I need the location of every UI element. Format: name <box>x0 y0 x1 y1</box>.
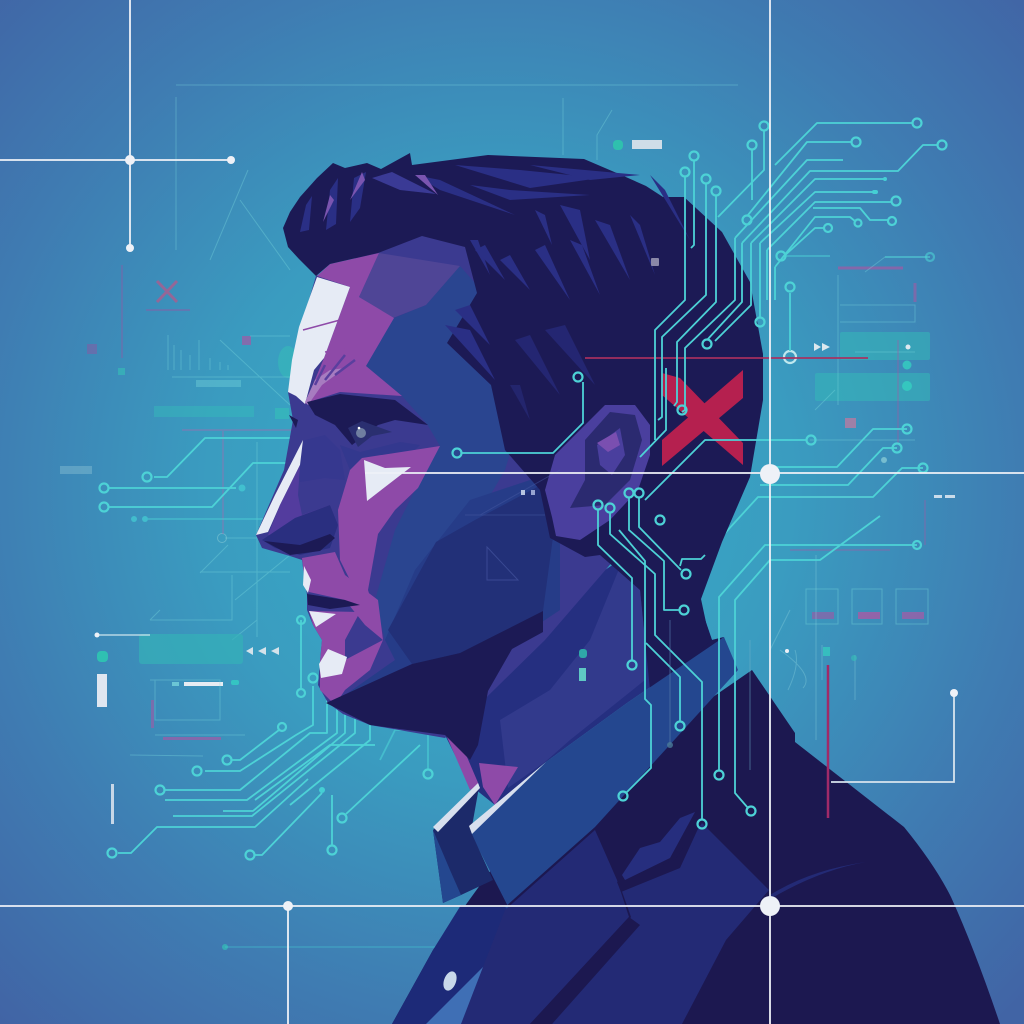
white crosshair lines behind head <box>0 0 235 252</box>
small squares <box>806 589 928 624</box>
upper lip highlight <box>303 566 311 593</box>
white forehead <box>288 277 350 404</box>
neck purple accents <box>447 737 518 805</box>
hair <box>283 153 763 650</box>
upper lapel <box>552 823 769 1024</box>
shirt collar <box>469 637 738 930</box>
nose side <box>295 435 345 482</box>
neck back shadow <box>640 590 724 690</box>
under eye socket <box>340 442 420 470</box>
chin white <box>319 649 347 678</box>
white connector lower right <box>831 689 958 782</box>
red line <box>585 357 868 359</box>
small details on face <box>487 547 518 580</box>
nostril shadow <box>262 505 338 555</box>
neck highlight <box>500 569 646 788</box>
nose front <box>268 465 338 540</box>
figure: head <box>256 153 763 760</box>
cheek purple <box>338 446 440 640</box>
shirt front <box>392 905 530 1024</box>
jacket body <box>392 670 1000 1024</box>
hair strands <box>300 165 690 420</box>
left collar piece <box>433 787 493 903</box>
nose white edge <box>256 440 303 535</box>
ear <box>545 405 650 540</box>
cheek dark blue <box>345 470 560 695</box>
circuits over head <box>452 152 816 828</box>
teal panel left <box>139 634 243 664</box>
eye <box>348 421 392 447</box>
teal dots <box>812 829 871 838</box>
lip purple <box>302 552 383 640</box>
lower lip <box>309 611 383 705</box>
face base <box>256 215 640 738</box>
face side blue <box>366 266 520 640</box>
jaw shadow <box>326 611 543 760</box>
faint technical details left <box>60 85 738 950</box>
left lapel <box>461 830 629 1024</box>
red X mark <box>662 370 743 466</box>
faint technical details right <box>613 140 955 838</box>
magenta vertical bar <box>827 665 829 818</box>
forehead panel <box>359 253 460 318</box>
top white rect <box>632 140 662 149</box>
circuits behind head <box>100 118 946 860</box>
forehead purple <box>305 253 402 404</box>
brow highlight <box>305 368 345 405</box>
figure: jacket and collar <box>392 560 1000 1024</box>
white cheek mark <box>364 460 411 501</box>
lower cheek shade <box>388 484 556 664</box>
eyebrow <box>289 394 428 445</box>
neck <box>445 560 724 805</box>
mouth line <box>307 594 360 609</box>
white bar <box>97 674 107 707</box>
